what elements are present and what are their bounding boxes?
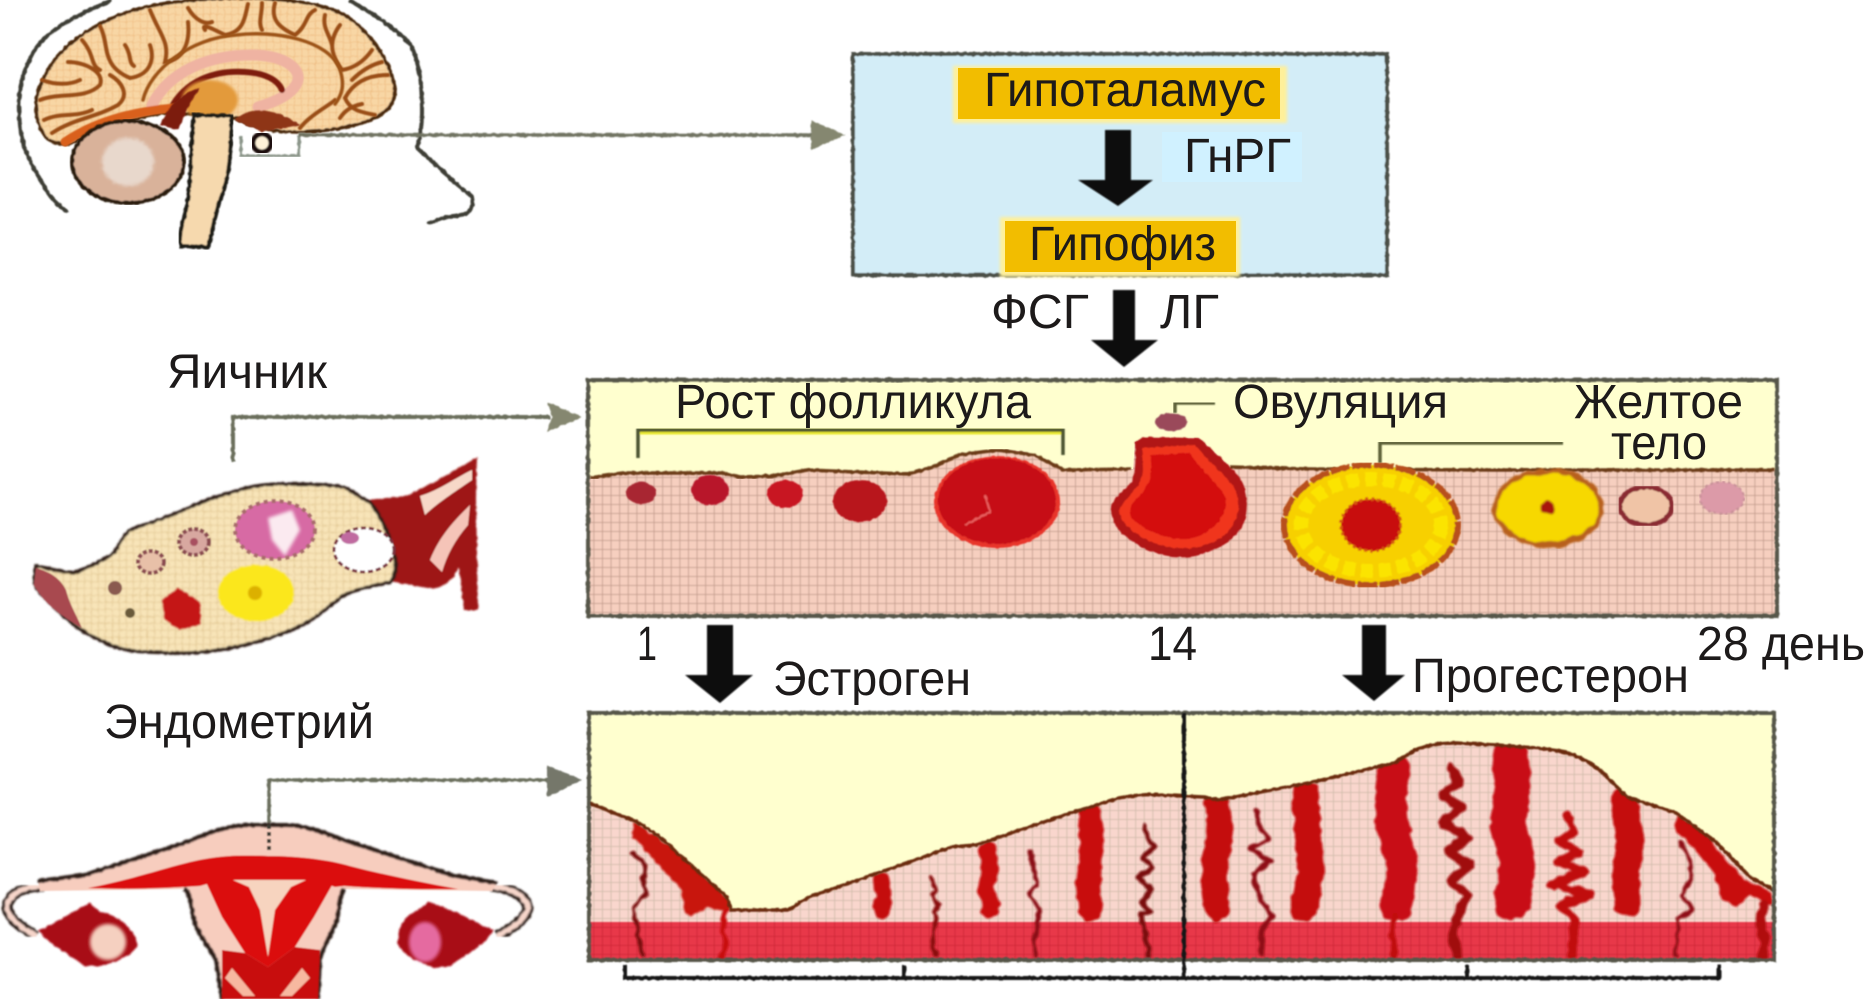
- corpus luteum: regressing: [1495, 471, 1601, 545]
- bottom bracket and day-14 divider: [625, 713, 1719, 978]
- red cavity band: [88, 856, 458, 889]
- arrow: ovary to follicle panel: [233, 402, 582, 462]
- blue background: [853, 54, 1387, 275]
- pink tissue: [588, 380, 1777, 616]
- functional layer: [589, 743, 1774, 960]
- label: ГнРГ: ГнРГ: [1184, 130, 1291, 183]
- ovary left tip: [34, 568, 82, 628]
- bracket: follicle growth: [638, 430, 1063, 458]
- illustration: ovary: [34, 457, 478, 653]
- ovum: [1155, 413, 1187, 431]
- label: Овуляция and Желтое тело background: [1218, 376, 1769, 470]
- corpus luteum: yellow: [218, 565, 294, 621]
- illustration: uterus with tubes and ovaries: [7, 825, 528, 999]
- label: day 28: 28 день: [1697, 618, 1865, 671]
- arrow: progesterone: [1342, 625, 1405, 701]
- arrow: pituitary to ovary: [1091, 290, 1158, 367]
- pale uterine cavity: [233, 880, 306, 957]
- follicle growth stages: [626, 456, 1060, 548]
- cervix pale marks: [225, 968, 255, 996]
- follicle: small rings: [179, 529, 209, 555]
- corpus callosum and limbic arches: [65, 34, 342, 142]
- yellow background above epithelium: [588, 380, 1777, 478]
- box: Гипофиз: Гипофиз: [1029, 218, 1216, 271]
- uterine wall red leaves: [205, 880, 335, 967]
- label: day 14: 14: [1148, 618, 1197, 671]
- panel border: [589, 713, 1774, 960]
- fundus pointer line: [267, 825, 271, 853]
- shedding layer left: [632, 822, 730, 918]
- illustration: brain in head profile: [19, 0, 473, 247]
- brainstem: [180, 115, 232, 247]
- follicle: white: [334, 528, 394, 572]
- follicle: purple: [235, 501, 315, 559]
- label: Яичник: Яичник: [167, 346, 328, 399]
- label: ЛГ: ЛГ: [1160, 286, 1219, 339]
- cerebral gyri: [40, 3, 388, 133]
- thalamus: [182, 80, 238, 120]
- panel border: [588, 380, 1777, 616]
- panel: hypothalamic-pituitary box: [853, 54, 1387, 277]
- panel: endometrium cycle: [589, 713, 1774, 978]
- arrow: uterus to endometrium panel: [269, 765, 582, 853]
- uterus outer: [38, 825, 497, 999]
- midbrain dark areas: [160, 88, 300, 132]
- ligament: [366, 457, 478, 610]
- arrow: estrogen: [685, 625, 753, 703]
- label: Эндометрий: Эндометрий: [104, 696, 374, 749]
- cerebellum: [72, 121, 184, 203]
- cerebrum: [36, 0, 395, 144]
- ovary body: [34, 484, 396, 653]
- ovary: left: [38, 903, 138, 966]
- corpus luteum: large: [1284, 465, 1458, 585]
- ovulation leader line: [1175, 403, 1215, 413]
- label: Овуляция: Овуляция: [1233, 376, 1448, 429]
- label: Желтое: Желтое: [1574, 376, 1743, 429]
- fallopian tube curves: [7, 886, 528, 936]
- corpus luteum leader line: [1380, 443, 1563, 463]
- label: ФСГ: ФСГ: [991, 286, 1089, 339]
- corpus albicans pale: [1700, 482, 1744, 514]
- yellow background: [589, 713, 1774, 960]
- box: Гипоталамус: Гипоталамус: [984, 64, 1266, 117]
- epithelium line: [590, 450, 1775, 478]
- arrow: hypothalamus to pituitary: [1078, 130, 1153, 206]
- panel: ovarian cycle: [588, 376, 1777, 616]
- label: Эстроген: Эстроген: [773, 653, 971, 706]
- endometrial surface line: [589, 743, 1774, 910]
- corpus albicans ring: [1620, 487, 1672, 525]
- proliferative glands: [882, 880, 884, 912]
- arrow: brain to hypothalamus box: [241, 120, 845, 156]
- uterus outline: [38, 825, 497, 999]
- basal layer: [589, 922, 1774, 960]
- secretory glands: [1214, 802, 1220, 908]
- follicle: red: [162, 588, 201, 630]
- label: Прогестерон: Прогестерон: [1412, 650, 1689, 703]
- small dark dots: [108, 581, 122, 595]
- ovary: right: [398, 902, 494, 968]
- label: тело: тело: [1611, 417, 1707, 470]
- label: Рост фолликула: Рост фолликула: [675, 376, 1031, 429]
- label: day 1: 1: [637, 618, 657, 671]
- ovulating follicle: [1111, 413, 1247, 557]
- glands: [632, 755, 1772, 958]
- cervix: [222, 947, 320, 999]
- hypophysis ring: [253, 134, 271, 152]
- head outline: [19, 1, 473, 223]
